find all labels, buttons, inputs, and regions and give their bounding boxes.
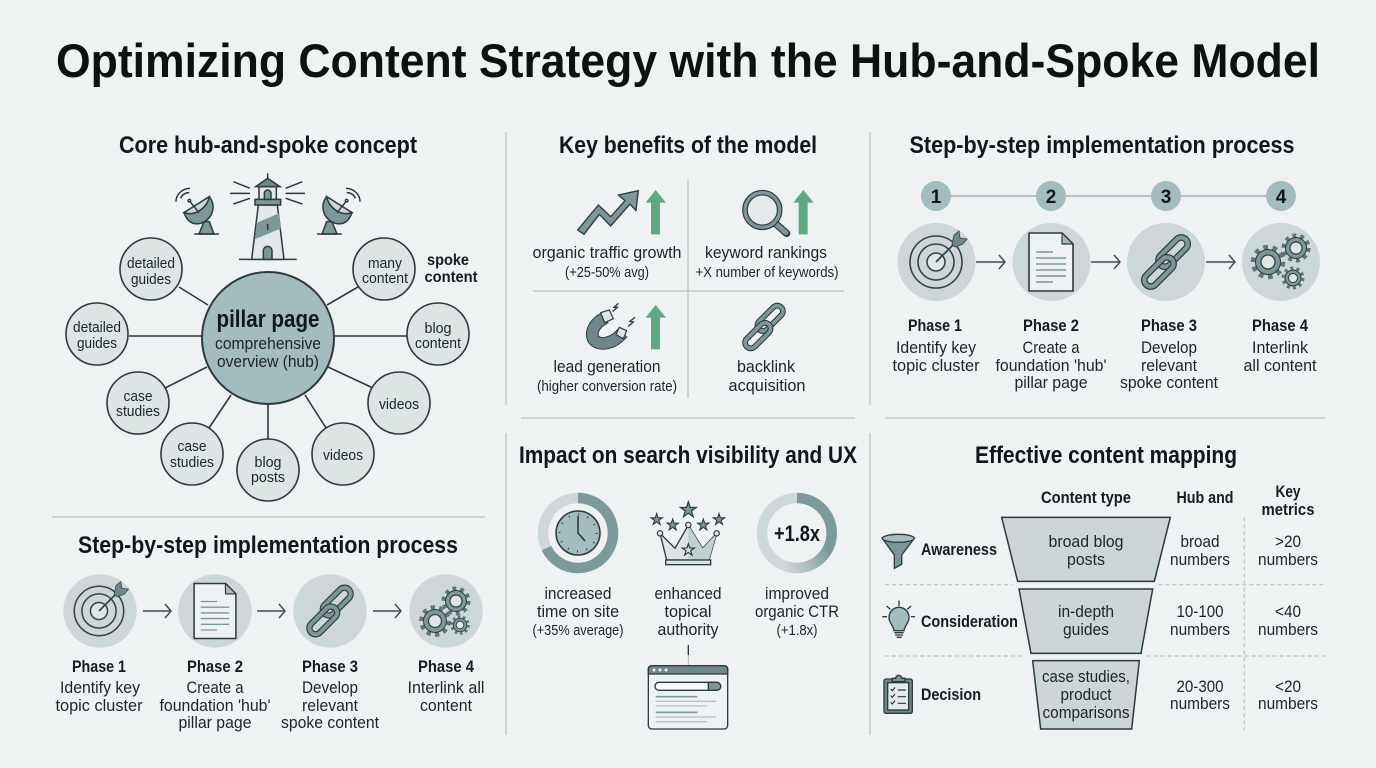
spoke: blog content: blog — [424, 320, 452, 337]
phase 1 text: topic cluster — [892, 356, 980, 375]
row: decision: case studies, — [1042, 667, 1130, 686]
spoke connector lines — [129, 287, 407, 439]
title: Optimizing Content Strategy with the Hub-and-Spoke Model — [56, 34, 1320, 87]
row: consideration: <40 — [1275, 602, 1301, 621]
metric: topical authority — [654, 584, 722, 639]
icon: target — [898, 223, 976, 301]
spoke: detailed guides: detailed — [73, 319, 121, 336]
spoke: detailed guides: guides — [77, 335, 117, 352]
row: decision: numbers — [1170, 694, 1230, 713]
spoke: detailed guides: guides — [131, 271, 171, 288]
icon: chain — [1127, 223, 1205, 301]
funnel stages — [1002, 517, 1170, 729]
phase 2 text: Create a — [1022, 338, 1080, 357]
panel: key benefits — [532, 132, 844, 398]
phase 2 text: Phase 2 — [1023, 316, 1079, 335]
icon: magnet — [592, 303, 635, 343]
icon: right satellite dish — [317, 188, 360, 234]
hub: pillar page: comprehensive — [215, 334, 321, 353]
heading: process: Step-by-step implementation process — [910, 132, 1294, 159]
row: consideration: numbers — [1170, 620, 1230, 639]
metric: time on site: time on site — [537, 602, 619, 621]
arrow — [257, 604, 285, 618]
spoke: many content: many — [368, 255, 402, 272]
row: consideration: guides — [1063, 620, 1109, 639]
phase 1 text — [892, 316, 980, 375]
row: decision: numbers — [1258, 694, 1318, 713]
phase 4 text: content — [420, 696, 472, 715]
phase 3 text: spoke content — [1120, 373, 1218, 392]
row: decision: comparisons — [1042, 703, 1130, 722]
phase 1 text: Identify key — [896, 338, 976, 357]
benefit: keyword rankings: keyword rankings — [705, 243, 827, 262]
phase 4 text: Phase 4 — [418, 657, 474, 676]
row: decision: <20 — [1275, 677, 1301, 696]
icon: green up arrow — [793, 190, 814, 234]
icon: trending line arrow — [578, 191, 638, 234]
arrow — [373, 604, 401, 618]
benefit: lead generation: lead generation — [554, 357, 660, 376]
metric: topical authority: authority — [658, 620, 719, 639]
phase 2 text: Phase 2 — [187, 657, 243, 676]
label: spoke content: spoke — [427, 252, 469, 269]
metric: organic CTR: improved — [765, 584, 829, 603]
spoke: detailed guides: detailed — [127, 255, 175, 272]
metric: organic CTR: (+1.8x) — [776, 622, 818, 639]
row: decision — [921, 667, 1318, 722]
phase 2 text — [160, 657, 270, 732]
label: spoke content — [424, 252, 478, 286]
chart: CTR donut — [762, 498, 832, 568]
arrow — [1206, 255, 1235, 269]
benefit: organic traffic: organic traffic growth — [532, 243, 682, 262]
funnel stage: awareness — [1002, 517, 1170, 581]
metric: time on site: increased — [544, 584, 612, 603]
spoke: blog posts: blog — [254, 454, 282, 471]
phase 2 text: pillar page — [1014, 373, 1088, 392]
phase 3 text: Develop — [302, 678, 358, 697]
benefit: lead generation — [537, 357, 677, 395]
phase 2 text: foundation 'hub' — [996, 356, 1106, 375]
spoke: videos — [368, 372, 430, 434]
spoke: case studies: case — [124, 388, 152, 405]
panel: core hub-and-spoke concept — [66, 132, 478, 501]
icon: chain — [293, 574, 367, 648]
icon: light bulb — [882, 601, 915, 637]
icon: target — [63, 574, 137, 648]
phase 1 text: Identify key — [60, 678, 140, 697]
icon: document — [178, 574, 252, 648]
benefit: backlink acquisition: acquisition — [728, 376, 806, 395]
phase 3 text — [1120, 316, 1218, 392]
spoke: case studies — [107, 372, 169, 434]
panel: impact on search visibility and UX — [519, 442, 857, 729]
step number track — [921, 181, 1296, 211]
phase 4 text — [1244, 316, 1317, 375]
row: awareness: posts — [1067, 550, 1105, 569]
heading: process: Step-by-step implementation process — [78, 532, 458, 559]
phase 1 text: Phase 1 — [908, 316, 962, 335]
phase 3 text: spoke content — [281, 713, 379, 732]
icon: browser search window — [648, 645, 728, 729]
table headers — [1041, 482, 1314, 519]
row: decision: Decision — [921, 685, 981, 704]
icons: stage icons — [882, 534, 915, 713]
hub: pillar page — [202, 272, 334, 404]
phase 4 text: all content — [1244, 356, 1317, 375]
phase 4 text: Interlink all — [408, 678, 484, 697]
table headers: Key — [1276, 482, 1301, 501]
icon: lighthouse and satellite dishes — [176, 173, 360, 259]
metric: topical authority: topical — [664, 602, 712, 621]
spoke: detailed guides — [66, 303, 128, 365]
benefit icons — [578, 190, 814, 349]
row: awareness: numbers — [1258, 550, 1318, 569]
step number track: 4 — [1276, 187, 1287, 208]
icon: magnifying glass — [745, 193, 787, 233]
metric: topical authority: enhanced — [654, 584, 722, 603]
icon: gears — [1242, 223, 1320, 301]
funnel stage: decision — [1033, 661, 1139, 729]
phase 2 text: pillar page — [178, 713, 252, 732]
table headers: metrics — [1262, 500, 1314, 519]
phase 3 text: relevant — [1141, 356, 1197, 375]
panel: step-by-step process, bottom left — [56, 532, 484, 732]
panel dividers — [52, 132, 1325, 735]
spoke: videos: videos — [323, 447, 363, 464]
spoke: videos — [312, 423, 374, 485]
row: decision: product — [1060, 685, 1112, 704]
icon: lighthouse — [230, 173, 305, 259]
icon: green up arrow — [646, 190, 666, 234]
heading: impact: Impact on search visibility and UX — [519, 442, 857, 469]
phase 3 text: relevant — [302, 696, 358, 715]
icon: green up arrow — [646, 305, 666, 349]
phase 3 text: Phase 3 — [302, 657, 358, 676]
step number track: 3 — [1161, 187, 1171, 208]
phase 3 text: Phase 3 — [1141, 316, 1197, 335]
icon: gears — [409, 574, 483, 648]
chart: time on site donut with clock — [543, 498, 613, 568]
benefit grid lines — [533, 180, 844, 398]
benefit: organic traffic — [532, 243, 682, 281]
benefit: backlink acquisition: backlink — [737, 357, 795, 376]
table dashed rules — [885, 517, 1325, 730]
row: decision: 20-300 — [1176, 677, 1224, 696]
icon: left satellite dish — [176, 188, 219, 234]
spoke: blog content — [407, 303, 469, 365]
benefit: backlink acquisition — [728, 357, 806, 395]
row: consideration: Consideration — [921, 612, 1018, 631]
metric: organic CTR: organic CTR — [755, 602, 839, 621]
arrow — [1091, 255, 1120, 269]
spoke: many content: content — [362, 270, 409, 287]
row: consideration: in-depth — [1058, 602, 1114, 621]
step number track: 1 — [931, 187, 942, 208]
benefit: lead generation: (higher conversion rate) — [537, 378, 677, 395]
label: spoke content: content — [424, 269, 478, 286]
spoke: videos: videos — [379, 396, 419, 413]
metric: time on site — [532, 584, 624, 639]
icon: chain link — [740, 303, 788, 351]
icon: document — [1012, 223, 1090, 301]
spoke: blog posts — [237, 439, 299, 501]
phase 1 text: topic cluster — [56, 696, 143, 715]
phase 3 text — [281, 657, 379, 732]
hub: pillar page: overview (hub) — [217, 352, 319, 371]
arrow — [143, 604, 171, 618]
row: awareness: numbers — [1170, 550, 1230, 569]
row: consideration: 10-100 — [1176, 602, 1224, 621]
phase 4 text: Phase 4 — [1252, 316, 1308, 335]
row: consideration: numbers — [1258, 620, 1318, 639]
metric: organic CTR — [755, 584, 839, 639]
phase 4 text — [408, 657, 484, 715]
phase 2 text: foundation 'hub' — [160, 696, 270, 715]
phase 1 text — [56, 657, 143, 715]
phase 2 text — [996, 316, 1106, 392]
hub: pillar page: pillar page — [216, 306, 320, 333]
icon: clipboard — [884, 675, 912, 713]
phase 1 text: Phase 1 — [72, 657, 126, 676]
benefit: keyword rankings — [696, 243, 838, 281]
spoke: case studies — [161, 423, 223, 485]
phase 4 text: Interlink — [1252, 338, 1308, 357]
spoke: case studies: studies — [170, 454, 214, 471]
icon: crown with stars — [651, 502, 725, 565]
row: awareness: broad blog — [1048, 532, 1124, 551]
heading: core concept: Core hub-and-spoke concept — [119, 132, 417, 159]
spoke: blog posts: posts — [251, 469, 285, 486]
metric: time on site: (+35% average) — [532, 622, 624, 639]
phase 2 text: Create a — [186, 678, 244, 697]
row: awareness: >20 — [1275, 532, 1301, 551]
heading: mapping: Effective content mapping — [975, 442, 1237, 469]
benefit: organic traffic: (+25-50% avg) — [565, 264, 649, 281]
spoke: many content — [353, 238, 415, 300]
chart: CTR donut: +1.8x — [774, 521, 821, 546]
table headers: Content type — [1041, 488, 1131, 507]
spoke: case studies: studies — [116, 403, 160, 420]
funnel stage: consideration — [1019, 589, 1153, 653]
benefit: keyword rankings: +X number of keywords) — [696, 264, 838, 281]
row: consideration — [921, 602, 1318, 639]
spoke: case studies: case — [178, 438, 206, 455]
heading: key benefits: Key benefits of the model — [559, 132, 817, 159]
spoke: detailed guides — [120, 238, 182, 300]
phase 3 text: Develop — [1141, 338, 1197, 357]
row: awareness: broad — [1180, 532, 1220, 551]
step number track: 2 — [1046, 187, 1056, 208]
row: awareness — [921, 532, 1318, 569]
spoke: blog content: content — [415, 335, 462, 352]
row: awareness: Awareness — [921, 540, 997, 559]
icon: funnel — [882, 534, 914, 568]
table headers: Hub and — [1176, 488, 1234, 507]
panel: step-by-step process, top right — [892, 132, 1320, 392]
arrow — [976, 255, 1005, 269]
panel: effective content mapping — [882, 442, 1325, 730]
